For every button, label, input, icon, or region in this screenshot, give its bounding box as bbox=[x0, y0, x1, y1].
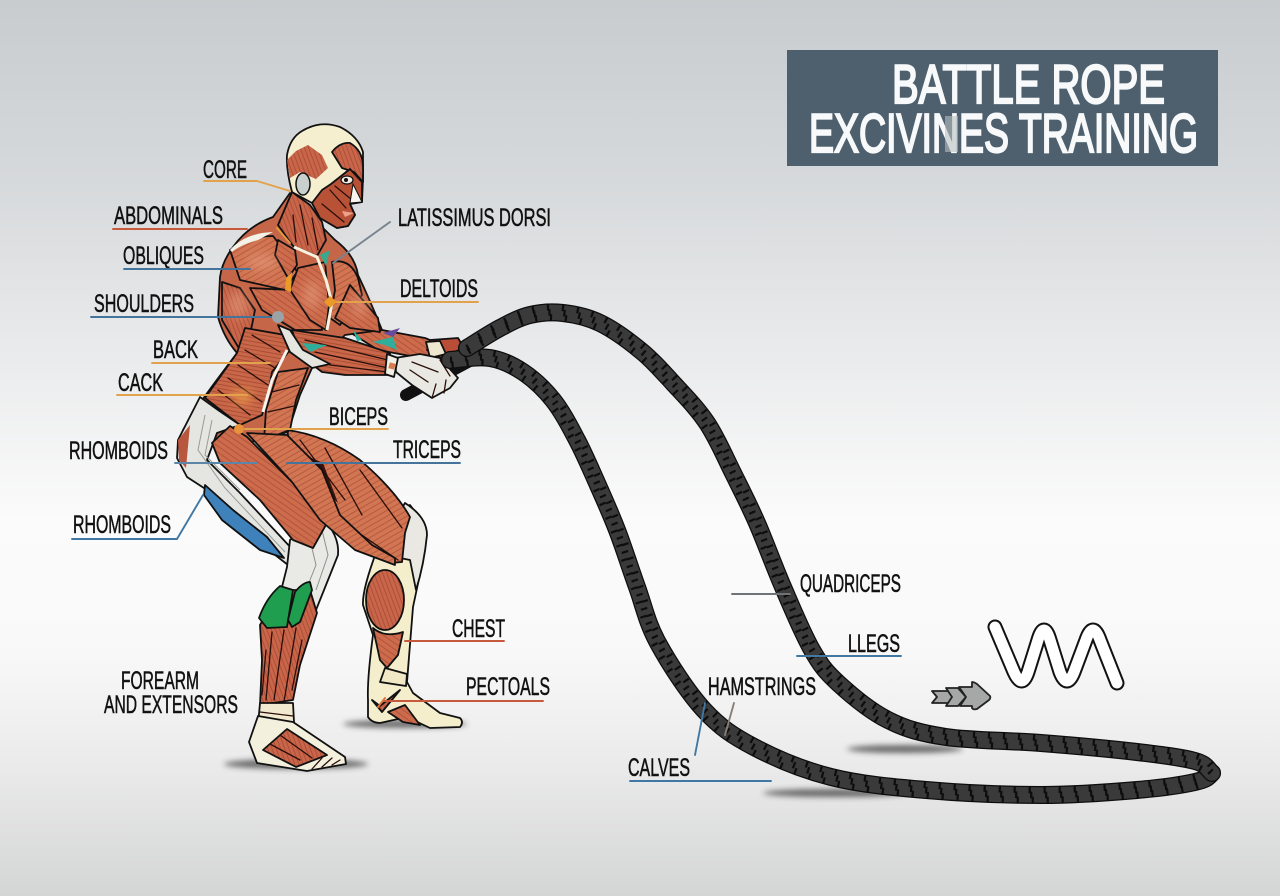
label: biceps: BICEPS bbox=[329, 403, 388, 431]
label: chest bbox=[405, 615, 505, 643]
wave icon bbox=[995, 627, 1117, 683]
label: pectoals: PECTOALS bbox=[466, 673, 550, 701]
label: deltoids: DELTOIDS bbox=[400, 275, 478, 303]
ribs and oblique muscles bbox=[205, 328, 290, 425]
near leg bbox=[177, 397, 395, 771]
label: abdominals: ABDOMINALS bbox=[114, 202, 223, 230]
ear bbox=[296, 173, 310, 195]
near arm bbox=[278, 325, 400, 375]
ankle wraps bbox=[258, 703, 294, 725]
knee and shin bbox=[280, 515, 338, 620]
torso bbox=[178, 192, 382, 448]
head bbox=[287, 124, 363, 228]
upper battle rope bbox=[466, 307, 1214, 778]
label: forearm and extensors bbox=[104, 667, 238, 719]
label: latissimus dorsi: LATISSIMUS DORSI bbox=[398, 204, 551, 232]
label: triceps: TRICEPS bbox=[393, 436, 461, 464]
label: core bbox=[203, 156, 290, 191]
label: abdominals bbox=[113, 202, 290, 243]
label: obliques: OBLIQUES bbox=[123, 242, 204, 270]
title line 1: BATTLE ROPE bbox=[892, 53, 1165, 115]
label: quadriceps: QUADRICEPS bbox=[800, 570, 901, 598]
ground shadows bbox=[224, 720, 963, 797]
back and deltoid muscles bbox=[230, 236, 297, 290]
label: latissimus dorsi bbox=[333, 204, 551, 263]
figure: muscular anatomy bbox=[177, 124, 468, 771]
label: calves bbox=[628, 703, 771, 782]
label: back bbox=[152, 336, 270, 364]
glove and hand bbox=[385, 338, 468, 398]
label: shoulders: SHOULDERS bbox=[94, 290, 194, 318]
label: forearm and extensors: AND EXTENSORS bbox=[104, 691, 238, 719]
label: hamstrings bbox=[708, 673, 816, 735]
label: llegs: LLEGS bbox=[848, 630, 900, 658]
eye bbox=[341, 176, 353, 184]
label: rhomboids lower: RHOMBOIDS bbox=[73, 511, 171, 539]
green calf highlight bbox=[259, 586, 293, 628]
label: hamstrings: HAMSTRINGS bbox=[708, 673, 816, 701]
near thigh bbox=[212, 426, 327, 548]
label: cack bbox=[117, 369, 247, 397]
label: shoulders bbox=[91, 290, 284, 323]
label: cack: CACK bbox=[118, 369, 163, 397]
far thigh bbox=[287, 430, 410, 563]
chest muscles bbox=[290, 262, 329, 330]
label: llegs bbox=[797, 630, 901, 658]
arrow icon bbox=[932, 682, 990, 709]
label: chest: CHEST bbox=[452, 615, 505, 643]
label: rhomboids upper: RHOMBOIDS bbox=[69, 437, 168, 465]
far arm bbox=[340, 265, 442, 360]
muscle highlights bbox=[228, 254, 367, 319]
neck bbox=[278, 192, 326, 256]
label: calves: CALVES bbox=[628, 754, 690, 782]
label: back: BACK bbox=[153, 336, 198, 364]
green calf highlight bbox=[288, 582, 312, 627]
far leg bbox=[287, 430, 462, 728]
label: forearm and extensors: FOREARM bbox=[121, 667, 199, 695]
label: biceps bbox=[234, 403, 388, 434]
lower battle rope bbox=[448, 352, 1214, 800]
label: rhomboids lower bbox=[72, 495, 203, 539]
label: pectoals bbox=[378, 673, 550, 707]
abdominal muscles bbox=[264, 368, 308, 440]
title banner bbox=[787, 50, 1218, 166]
rear hip band bbox=[177, 397, 303, 567]
label: core: CORE bbox=[203, 156, 247, 184]
label: deltoids bbox=[324, 275, 478, 308]
near foot bbox=[249, 716, 346, 771]
